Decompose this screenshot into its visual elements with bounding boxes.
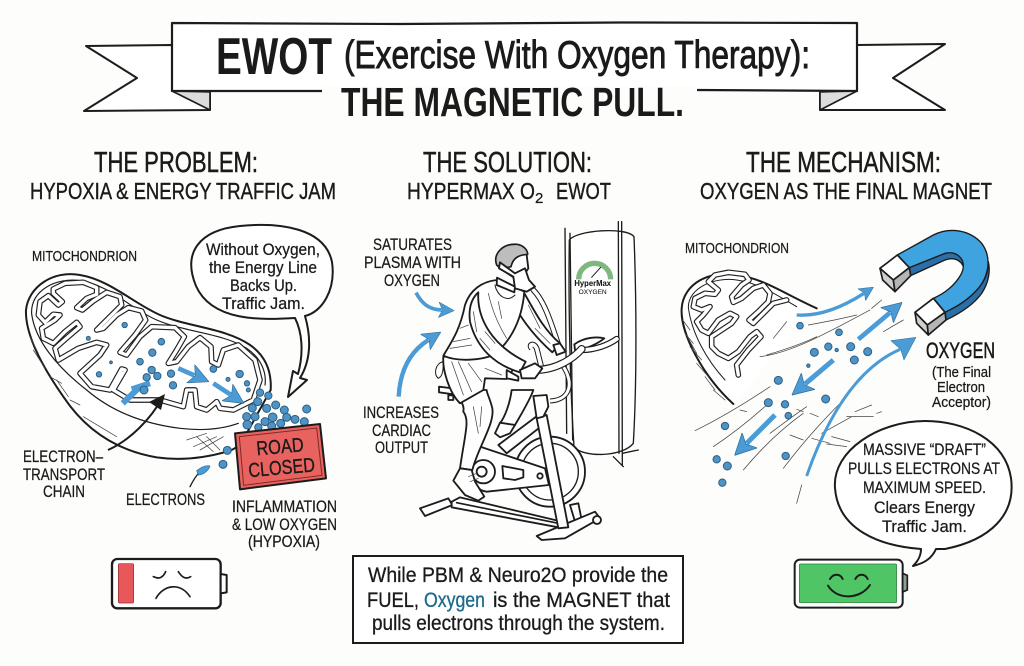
- label: increases cardiac output: CARDIAC: [372, 421, 431, 440]
- oxygen reservoir bag: [565, 222, 638, 467]
- hair: [496, 244, 528, 268]
- callout box: is the MAGNET that: [493, 589, 670, 612]
- label: oxygen final electron acceptor: Electron: [937, 379, 985, 396]
- saddle and towel: [439, 387, 458, 395]
- icon: full battery smiling face: [795, 560, 907, 608]
- heading: the solution: THE SOLUTION:: [423, 147, 592, 179]
- cyclist lower body: [453, 390, 533, 501]
- speech bubble: traffic jam: Backs Up.: [230, 276, 297, 295]
- head: [498, 247, 528, 278]
- speech bubble: massive draft: [835, 421, 1012, 566]
- callout box: While PBM & Neuro2O provide the: [368, 564, 668, 587]
- label: saturates plasma: PLASMA WITH: [364, 253, 461, 272]
- heading: the problem: THE PROBLEM:: [94, 147, 258, 179]
- shorts: [443, 356, 515, 403]
- label: increases cardiac output: [363, 403, 439, 457]
- speech bubble: traffic jam: the Energy Line: [209, 258, 317, 277]
- icon: horseshoe magnet: [880, 230, 989, 335]
- label: electron-transport chain with arrow: ELECTRON–: [23, 447, 103, 466]
- heading: the solution: HYPERMAX O: [407, 178, 535, 204]
- label: increases cardiac output: INCREASES: [363, 403, 439, 422]
- oxygen reservoir bag: OXYGEN: [579, 289, 607, 296]
- label: inflammation and low oxygen: & LOW OXYGEN: [232, 515, 337, 534]
- label: inflammation and low oxygen: INFLAMMATION: [232, 497, 337, 516]
- label: oxygen final electron acceptor: [926, 338, 995, 411]
- label: oxygen final electron acceptor: OXYGEN: [926, 338, 995, 363]
- panel: the problem: [23, 147, 337, 608]
- blue flow arrows: [747, 293, 916, 476]
- speed lines and floor grid: [695, 300, 903, 503]
- mitochondrion fragment: [682, 272, 817, 404]
- label: saturates plasma: [364, 235, 461, 290]
- mitochondrion illustration: [26, 274, 311, 468]
- label: electron-transport chain with arrow: CHAIN: [43, 482, 85, 501]
- label: inflammation and low oxygen: [232, 497, 337, 551]
- panel: the mechanism: [682, 147, 1012, 608]
- title text: [216, 28, 810, 125]
- title text: THE MAGNETIC PULL.: [341, 79, 684, 125]
- hands: [520, 363, 542, 378]
- mask: [499, 262, 535, 292]
- label: electron-transport chain with arrow: TRANSPORT: [23, 465, 105, 484]
- hose: [533, 290, 559, 347]
- oxygen reservoir bag: HyperMax: [574, 279, 612, 288]
- label: oxygen final electron acceptor: (The Final: [932, 364, 991, 381]
- cyclist upper body: [436, 244, 617, 403]
- title banner: [84, 22, 945, 122]
- callout box: FUEL,: [367, 589, 419, 612]
- heading: the mechanism: [700, 147, 992, 204]
- inner cristae folds: [38, 282, 260, 410]
- near arm: [470, 292, 526, 372]
- label: increases cardiac output: OUTPUT: [375, 438, 428, 457]
- panel: the solution: [353, 147, 683, 643]
- label: oxygen final electron acceptor: Acceptor): [932, 394, 991, 411]
- title text: (Exercise With Oxygen Therapy):: [344, 34, 810, 77]
- label: saturates plasma: SATURATES: [373, 235, 452, 254]
- electrons: [713, 322, 872, 486]
- callout box: pulls electrons through the system.: [372, 612, 665, 635]
- speech bubble: massive draft: MASSIVE “DRAFT”: [863, 440, 986, 459]
- electrons pointer: [190, 466, 210, 487]
- speech bubble: massive draft: Traffic Jam.: [882, 517, 967, 536]
- label: saturates plasma: OXYGEN: [384, 271, 440, 290]
- handlebars: [574, 337, 604, 350]
- heading: the problem: HYPOXIA & ENERGY TRAFFIC JAM: [30, 178, 336, 204]
- road closed sign: CLOSED: [247, 454, 316, 482]
- road closed sign: [235, 424, 326, 489]
- label: mitochondrion: MITOCHONDRION: [32, 248, 137, 265]
- collar: [497, 278, 515, 292]
- heading: the mechanism: THE MECHANISM:: [746, 147, 941, 179]
- title text: EWOT: [216, 28, 332, 86]
- label: mitochondrion: MITOCHONDRION: [685, 240, 789, 257]
- heading: the solution: [407, 147, 611, 207]
- exercise bike: [420, 395, 601, 540]
- label: electron-transport chain with arrow: [23, 394, 165, 501]
- arrows to body: [399, 293, 442, 397]
- speech bubble: traffic jam: [191, 225, 333, 397]
- heading: the solution: 2: [535, 190, 543, 207]
- inner folds: [693, 272, 787, 375]
- road closed sign: ROAD: [256, 434, 305, 460]
- icon: low battery sad face: [112, 559, 227, 608]
- speech bubble: traffic jam: Traffic Jam.: [222, 294, 305, 313]
- speech bubble: massive draft: MAXIMUM SPEED.: [863, 478, 986, 497]
- electrons in the jam: [86, 322, 311, 468]
- callout box: [353, 556, 683, 643]
- torso: [443, 280, 524, 360]
- far arm: [515, 290, 560, 352]
- heading: the solution: EWOT: [556, 178, 611, 204]
- label: inflammation and low oxygen: (HYPOXIA): [248, 532, 320, 551]
- flow arrows: [123, 368, 231, 403]
- heading: the problem: [30, 147, 336, 204]
- callout box: Oxygen: [424, 589, 485, 612]
- speech bubble: traffic jam: Without Oxygen,: [206, 240, 320, 259]
- label: electrons: ELECTRONS: [126, 490, 205, 509]
- speech bubble: massive draft: Clears Energy: [874, 498, 975, 517]
